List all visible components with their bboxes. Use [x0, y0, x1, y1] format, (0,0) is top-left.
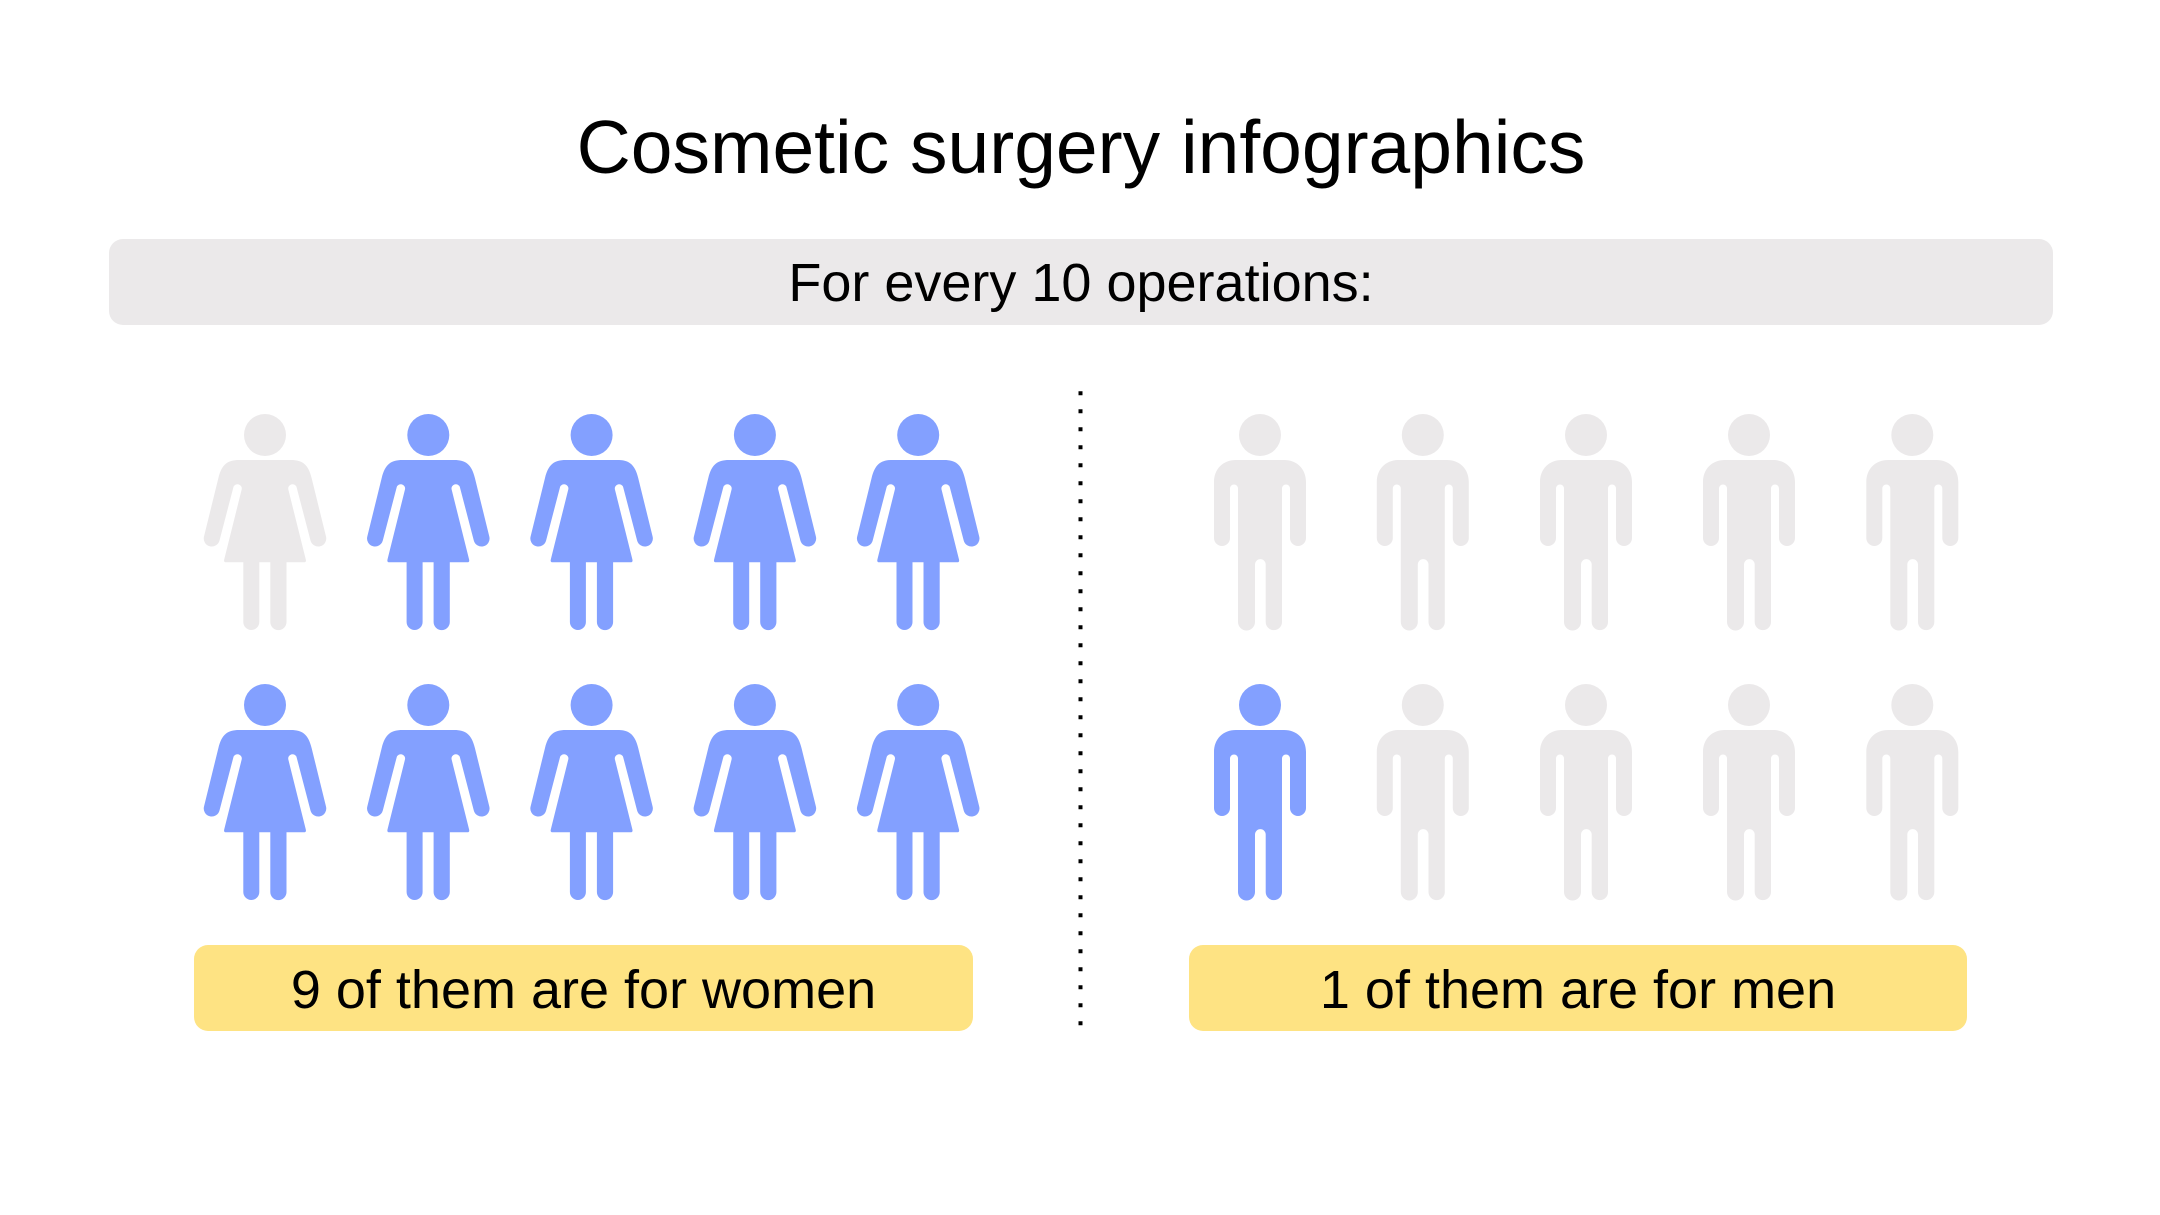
- icon: man grey: [1377, 684, 1469, 900]
- icon: man blue: [1214, 684, 1306, 900]
- icon: woman blue: [530, 414, 653, 630]
- divider: dotted line: [1078, 391, 1082, 1026]
- callout: men: [1189, 945, 1967, 1031]
- banner: for every 10 operations: [109, 239, 2053, 325]
- banner: for every 10 operations: For every 10 operations:: [788, 253, 1374, 313]
- icon: woman blue: [694, 684, 816, 900]
- icon: man grey: [1540, 414, 1632, 630]
- icon: woman blue: [367, 684, 490, 900]
- icon: woman blue: [530, 684, 653, 900]
- icon: woman grey: [204, 414, 326, 630]
- icon: woman blue: [204, 684, 326, 900]
- callout: women: 9 of them are for women: [291, 960, 876, 1020]
- icon: man grey: [1703, 414, 1795, 630]
- icon: woman blue: [857, 414, 979, 630]
- icon: man grey: [1540, 684, 1632, 900]
- icon: woman blue: [694, 414, 816, 630]
- icon: woman blue: [857, 684, 979, 900]
- title: Cosmetic surgery infographics: [577, 105, 1585, 189]
- icon: man grey: [1214, 414, 1306, 630]
- panel: women pictogram: [204, 414, 979, 900]
- icon: man grey: [1866, 684, 1958, 900]
- icon: man grey: [1866, 414, 1958, 630]
- panel: men pictogram: [1214, 414, 1958, 900]
- callout: women: [194, 945, 973, 1031]
- icon: man grey: [1377, 414, 1469, 630]
- callout: men: 1 of them are for men: [1320, 960, 1836, 1020]
- icon: woman blue: [367, 414, 490, 630]
- icon: man grey: [1703, 684, 1795, 900]
